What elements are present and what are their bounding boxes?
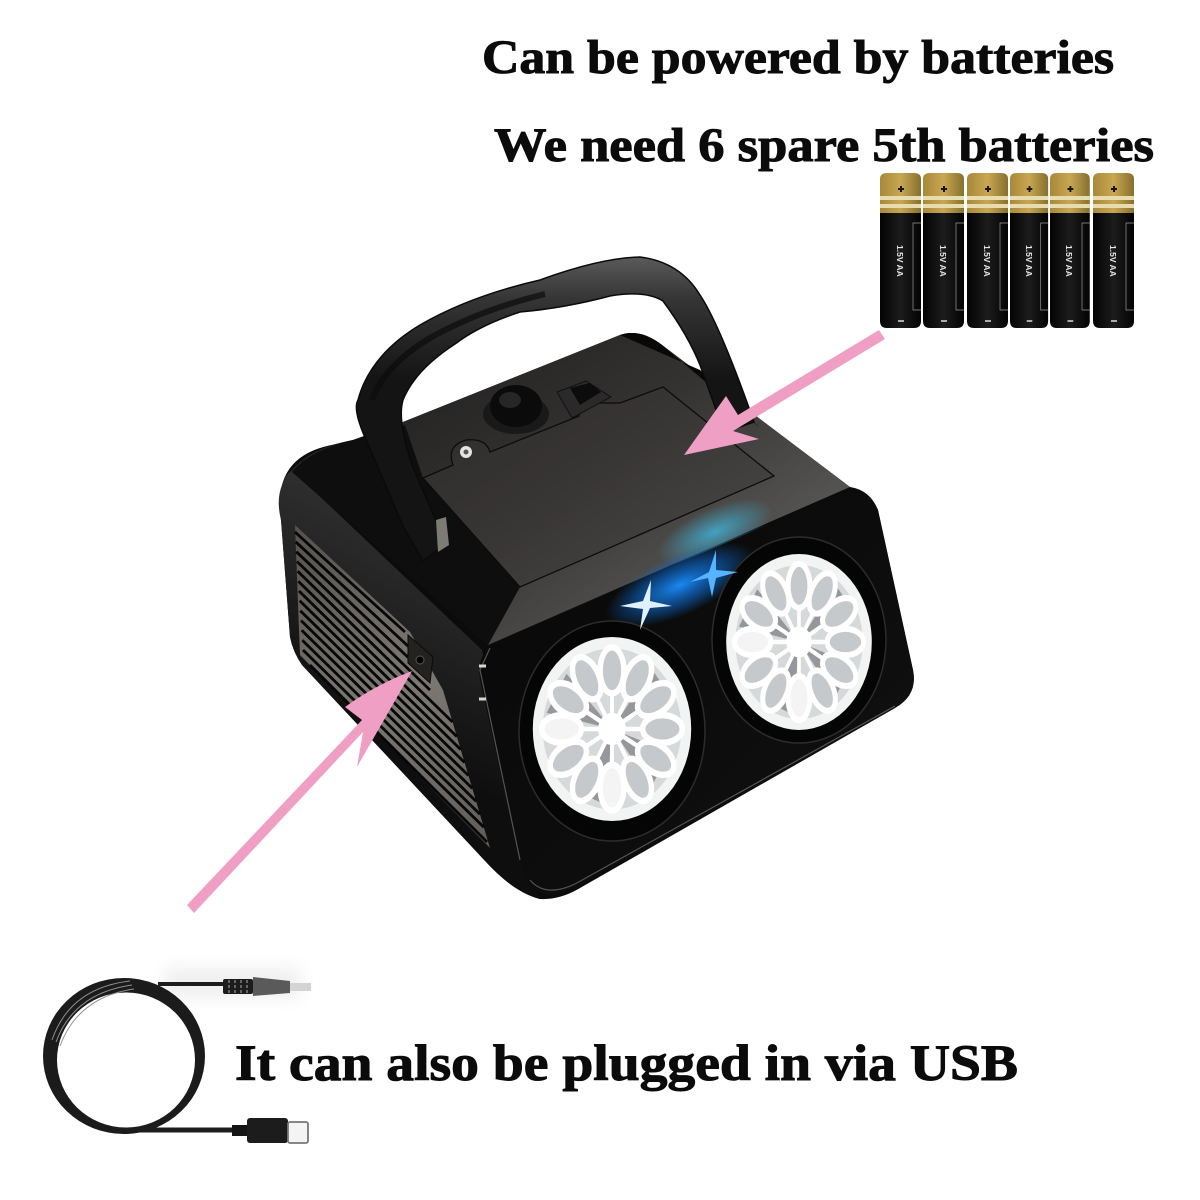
icon: six AA batteries: 1.5V AA xyxy=(1064,245,1074,277)
screw xyxy=(460,446,472,458)
cable highlight strands xyxy=(52,981,134,1046)
faint background shadow xyxy=(165,968,300,998)
right fan xyxy=(712,537,886,743)
icon: USB cable xyxy=(43,968,311,1143)
left fan xyxy=(519,621,705,841)
upper lead xyxy=(158,982,225,986)
vents xyxy=(295,525,490,848)
cyan glow on top xyxy=(649,485,781,579)
USB port xyxy=(408,635,433,683)
switch xyxy=(557,381,611,418)
front face xyxy=(479,492,914,895)
knob xyxy=(483,385,549,434)
title: can be powered by batteries: Can be powered by batteries xyxy=(482,31,1114,84)
USB-C strain relief xyxy=(232,1125,248,1136)
battery lid outline xyxy=(423,387,774,587)
lower lead xyxy=(112,1128,235,1132)
star light right xyxy=(690,550,738,597)
icon: six AA batteries: 1.5V AA xyxy=(895,245,905,277)
caption: USB plug-in: It can also be plugged in via USB xyxy=(235,1036,1018,1092)
dark rear strip behind lid xyxy=(620,333,760,428)
icon: six AA batteries: 1.5V AA xyxy=(1024,245,1034,277)
icon: six AA batteries: 1.5V AA xyxy=(1108,245,1118,277)
top surface xyxy=(292,333,850,645)
icon: six AA batteries xyxy=(880,173,1134,328)
arrow: to battery lid xyxy=(684,330,885,455)
product: bubble machine xyxy=(279,257,914,899)
barrel plug strain relief xyxy=(223,979,253,994)
USB-C body xyxy=(247,1118,288,1143)
icon: six AA batteries: 1.5V AA xyxy=(982,245,992,277)
dark area left of the lid xyxy=(292,425,520,645)
star light left xyxy=(620,580,672,630)
arrow: to USB port xyxy=(187,671,412,913)
dark base silhouette xyxy=(280,333,914,899)
subtitle: 6 spare 5th batteries: We need 6 spare 5th batteries xyxy=(494,119,1154,172)
barrel plug pin xyxy=(290,983,311,991)
metal seam xyxy=(479,666,486,699)
left side panel xyxy=(279,470,540,899)
front face edge highlight xyxy=(480,648,895,890)
barrel plug body xyxy=(253,977,290,996)
icon: six AA batteries: 1.5V AA xyxy=(938,245,948,277)
handle xyxy=(356,257,754,561)
cable loop xyxy=(43,978,205,1134)
blue glow on front face xyxy=(595,525,765,645)
USB-C metal tip xyxy=(288,1122,308,1143)
